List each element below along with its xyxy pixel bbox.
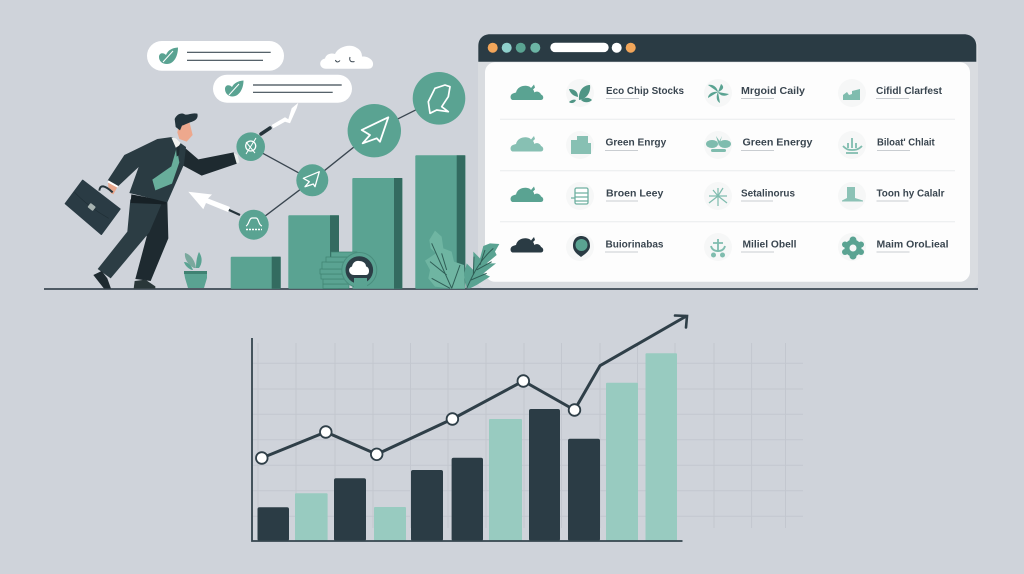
node: leaf xyxy=(413,72,465,125)
icon: gear flower xyxy=(842,236,864,260)
icon: leaves xyxy=(569,85,592,103)
icon: small chart xyxy=(843,89,860,100)
text: Green Energy: Green Energy xyxy=(742,136,813,148)
shirt collar xyxy=(171,137,181,150)
axes xyxy=(252,338,682,541)
plant: fern overlapping panel xyxy=(464,243,499,288)
tie xyxy=(152,148,179,190)
right arm xyxy=(182,145,237,176)
cloud with eyes xyxy=(320,46,373,69)
window content card xyxy=(485,62,970,282)
text: Miliel Obell: Miliel Obell xyxy=(742,238,797,250)
back leg xyxy=(135,201,168,281)
icon: sprout xyxy=(706,136,731,152)
window title bar xyxy=(478,34,976,62)
chart: bars and line growth xyxy=(252,316,803,541)
text: Maim OroLieal: Maim OroLieal xyxy=(876,238,949,250)
bars xyxy=(258,353,677,541)
icon: flower xyxy=(708,84,729,103)
node: large rocket xyxy=(348,104,401,157)
speech bubble 1 xyxy=(147,41,284,71)
front leg xyxy=(98,199,161,278)
text: Broen Leey: Broen Leey xyxy=(606,188,663,200)
bar chart: green growth bars xyxy=(231,155,465,289)
text: Setalinorus: Setalinorus xyxy=(741,188,795,200)
text: Toon hy Calalr: Toon hy Calalr xyxy=(876,188,944,200)
icon: stacked list xyxy=(571,188,588,204)
connector lines between nodes xyxy=(251,98,439,225)
trend line with arrow xyxy=(262,316,687,458)
arrow: left to businessman xyxy=(188,192,240,215)
panel: browser window xyxy=(478,34,978,288)
text: Eco Chip Stocks: Eco Chip Stocks xyxy=(606,85,684,97)
briefcase xyxy=(65,180,120,234)
arrow: up to speech bubble xyxy=(261,103,298,134)
chart grid xyxy=(252,343,803,528)
belt xyxy=(131,194,167,204)
node: top left coin xyxy=(236,132,265,161)
ground line xyxy=(44,288,978,290)
coin stack xyxy=(320,252,357,288)
cloud icon row 2 xyxy=(511,136,543,152)
hair xyxy=(175,113,198,130)
icon: coin badge xyxy=(342,252,377,288)
icon: globe badge xyxy=(573,236,590,257)
left cuff and hand xyxy=(108,180,118,194)
icon: data box xyxy=(571,136,591,154)
speech bubble 2 xyxy=(213,75,352,103)
node: small rocket xyxy=(296,164,328,196)
plant: large oak leaf xyxy=(425,231,465,289)
cloud icon row 3 xyxy=(511,186,543,202)
node: bottom arch xyxy=(239,210,269,240)
text: Green Enrgy: Green Enrgy xyxy=(606,136,666,148)
businessman illustration xyxy=(65,113,239,289)
text: Buiorinabas: Buiorinabas xyxy=(606,238,664,250)
data points xyxy=(256,375,580,464)
jacket with left arm xyxy=(108,137,186,202)
cloud icon row 1 xyxy=(511,84,543,100)
text: Biloat Chlait: Biloat' Chlait xyxy=(877,136,935,148)
cloud icon row 4 xyxy=(511,237,543,252)
icon: plants row xyxy=(843,138,862,153)
text: Mrgoid Caily: Mrgoid Caily xyxy=(741,85,805,97)
text: Cifidl Clarfest: Cifidl Clarfest xyxy=(876,85,942,97)
head xyxy=(177,122,193,142)
icon: anchor xyxy=(711,239,725,258)
icon: potted plant xyxy=(184,252,207,288)
shoes xyxy=(93,271,111,289)
icon: pedestal xyxy=(842,187,863,202)
right cuff xyxy=(234,153,239,164)
icon: burst xyxy=(709,188,727,206)
